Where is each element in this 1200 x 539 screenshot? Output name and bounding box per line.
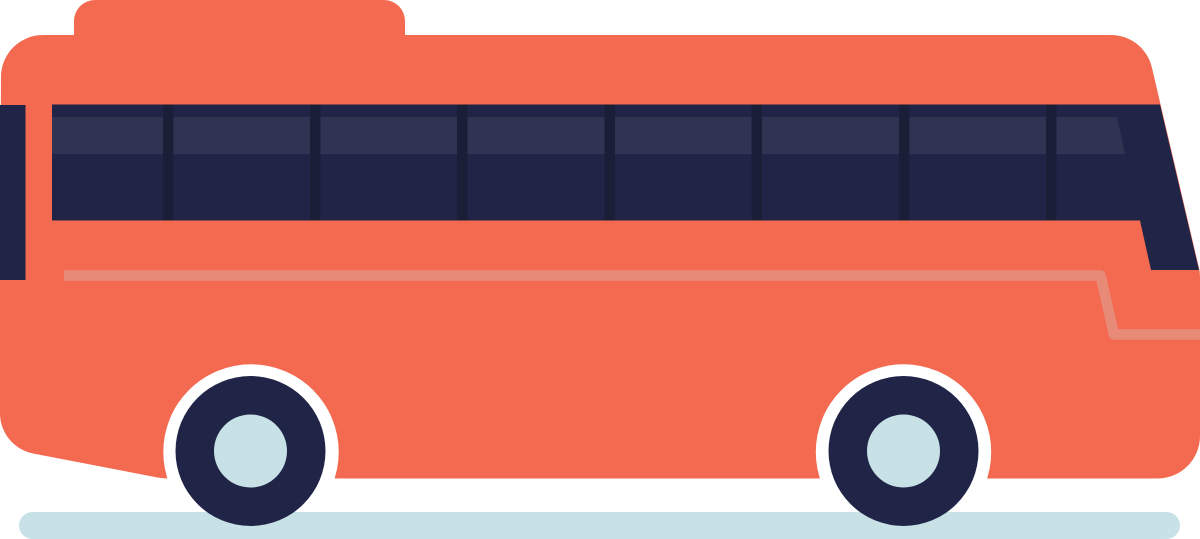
wheel arches (163, 364, 991, 539)
rear wheel (176, 376, 326, 526)
front windshield and side windows (52, 104, 1199, 270)
side stripe (64, 276, 1200, 334)
road shadow (19, 512, 1180, 539)
window highlight band (52, 117, 1125, 154)
rear window (0, 105, 26, 280)
window pillars (163, 104, 1056, 220)
bus roof unit (74, 0, 405, 36)
front wheel (828, 376, 978, 526)
